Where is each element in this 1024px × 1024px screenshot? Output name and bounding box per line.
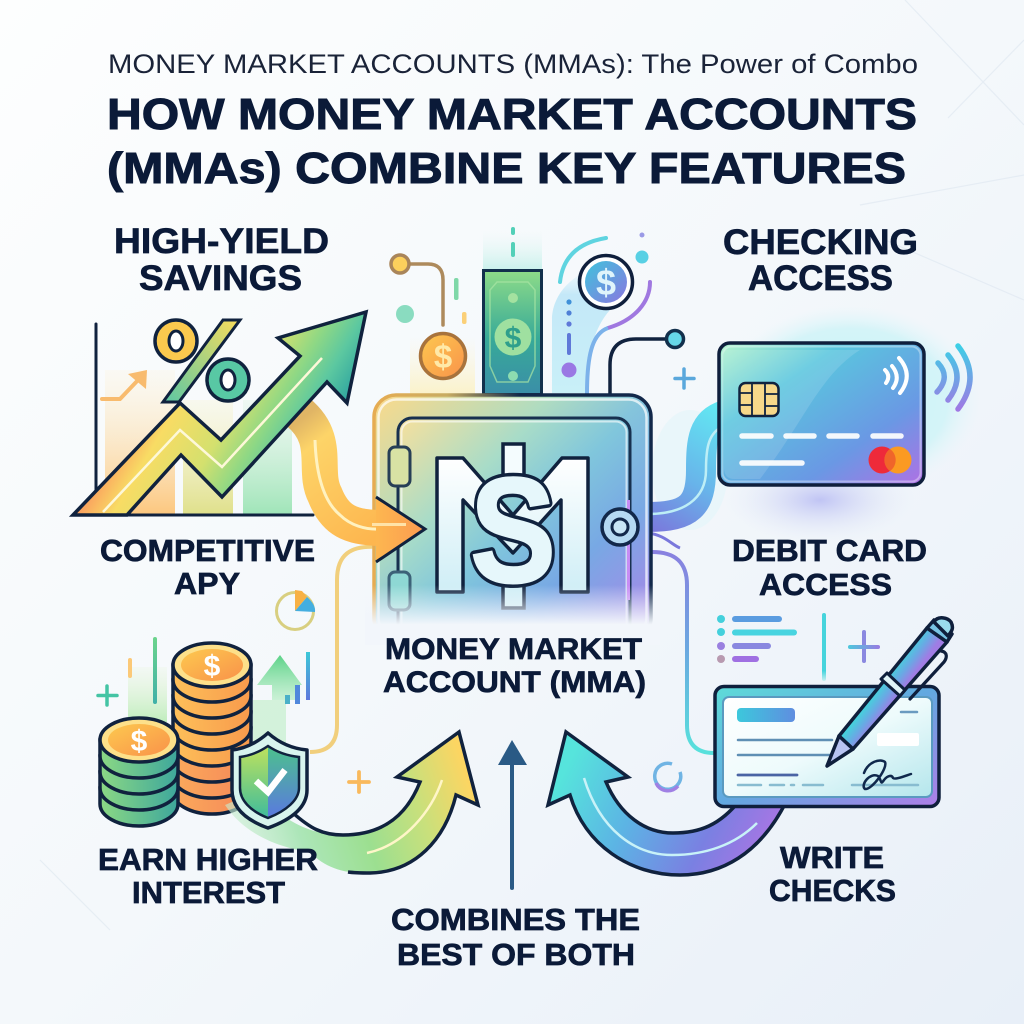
label: money market account: MONEY MARKET	[385, 633, 642, 666]
label: debit card access: DEBIT CARD	[732, 533, 927, 568]
arrow: combines upward	[498, 740, 527, 890]
dial	[602, 509, 638, 545]
bars	[105, 370, 292, 515]
card network logo	[868, 446, 912, 474]
icon: progress ring	[655, 763, 681, 791]
bottom fade	[365, 585, 660, 645]
heading: checking access: ACCESS	[748, 259, 893, 298]
icon: orange coin with connector	[391, 255, 466, 378]
main title: HOW MONEY MARKET ACCOUNTS	[107, 90, 917, 139]
label: earn higher interest: INTEREST	[132, 875, 285, 910]
decorative bar and plus	[822, 613, 880, 681]
main title	[107, 90, 917, 193]
icon: pen	[827, 618, 952, 766]
label: competitive apy	[100, 533, 315, 601]
card number dashes	[742, 436, 901, 463]
label: combines the best of both	[391, 902, 640, 972]
label: write checks: CHECKS	[769, 873, 896, 908]
connector: swoosh from vault to debit card	[648, 410, 728, 548]
heading: high-yield savings	[114, 222, 329, 298]
connector: line from vault to check	[652, 552, 714, 753]
icon: blue coin with arcs	[560, 232, 650, 394]
label: combines the best of both: BEST OF BOTH	[397, 937, 635, 972]
icon: right coin stack: $	[204, 650, 221, 683]
label: competitive apy: COMPETITIVE	[100, 533, 315, 568]
label: debit card access: ACCESS	[759, 567, 892, 602]
label: money market account: ACCOUNT (MMA)	[383, 666, 646, 699]
chart: rising yield	[96, 320, 313, 515]
icon: security shield	[232, 733, 307, 828]
dollar sign: S	[470, 446, 556, 614]
card	[719, 343, 924, 485]
icons floating above the vault	[391, 227, 684, 395]
vault: money market account	[365, 395, 660, 645]
M logo	[437, 458, 588, 592]
icon: blue coin with arcs: $	[596, 262, 616, 303]
contactless waves	[937, 346, 970, 409]
percent sign	[155, 320, 249, 402]
check name pill	[737, 708, 795, 722]
connector: line from vault to coins	[310, 547, 378, 752]
arrow: interest curving into vault	[225, 732, 478, 873]
connector line and node	[610, 330, 684, 394]
heading: checking access	[723, 223, 918, 298]
hinge bottom	[389, 572, 410, 610]
arrow: checks curving into vault	[548, 732, 787, 875]
axes	[96, 324, 313, 515]
arrow: savings into vault	[298, 412, 425, 562]
label: write checks: WRITE	[780, 840, 884, 875]
icon: left coin stack: $	[131, 725, 148, 758]
icon: list lines	[717, 615, 797, 663]
label: money market account	[383, 633, 646, 699]
label: write checks	[769, 840, 896, 908]
contactless symbol on card	[885, 358, 907, 393]
label: competitive apy: APY	[174, 566, 240, 601]
label: earn higher interest	[98, 842, 318, 910]
icon: right coin stack	[173, 643, 251, 814]
decorative ticks and plus near coins	[98, 637, 167, 722]
heading: high-yield savings: HIGH-YIELD	[114, 222, 329, 261]
hinge top	[389, 447, 410, 486]
icon: banknote: $	[505, 322, 522, 355]
label: debit card access	[732, 533, 927, 602]
main title: (MMAs) COMBINE KEY FEATURES	[107, 144, 906, 193]
check document	[715, 686, 939, 806]
small trend arrow	[102, 370, 147, 399]
icon: banknote	[484, 227, 542, 394]
heading: checking access: CHECKING	[723, 223, 918, 262]
dollar sign: S	[470, 446, 556, 614]
check lines	[738, 712, 918, 785]
icon: left coin stack	[100, 718, 178, 826]
heading: high-yield savings: SAVINGS	[139, 259, 302, 298]
card glow	[720, 305, 980, 542]
label: earn higher interest: EARN HIGHER	[98, 842, 318, 877]
check amount box	[877, 733, 919, 746]
big growth arrow	[73, 312, 366, 515]
icon: orange plus	[349, 772, 369, 792]
label: combines the best of both: COMBINES THE	[391, 902, 640, 937]
signature	[864, 760, 911, 789]
icon: small plus near card	[675, 369, 694, 388]
subtitle: MONEY MARKET ACCOUNTS (MMAs): The Power of Combo	[108, 49, 918, 79]
chip	[740, 383, 778, 416]
icon: orange coin with connector: $	[434, 338, 452, 375]
icon: green up arrow	[253, 652, 310, 750]
debit card group	[719, 305, 980, 542]
pie ring icon	[276, 590, 315, 630]
